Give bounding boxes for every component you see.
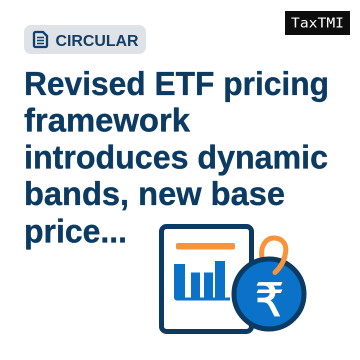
TaxTMI watermark: TaxTMI [291, 16, 344, 32]
rupee coin [234, 259, 304, 329]
document page [162, 226, 252, 332]
title [24, 65, 329, 250]
bar chart [174, 261, 230, 300]
title: Revised ETF pricing [24, 65, 329, 102]
icon: report document with rupee tag [162, 226, 304, 332]
orange heading bar [176, 243, 235, 250]
badge: circular [24, 25, 146, 54]
title: bands, new base [24, 175, 285, 212]
orange hook [262, 238, 286, 272]
rupee symbol: ₹ [255, 273, 284, 327]
title: framework [24, 102, 191, 139]
icon: document [34, 32, 47, 47]
badge label: CIRCULAR [56, 33, 138, 50]
title: price... [24, 213, 127, 250]
front of hook [275, 256, 285, 272]
title: introduces dynamic [24, 138, 328, 175]
TaxTMI watermark [285, 11, 350, 35]
